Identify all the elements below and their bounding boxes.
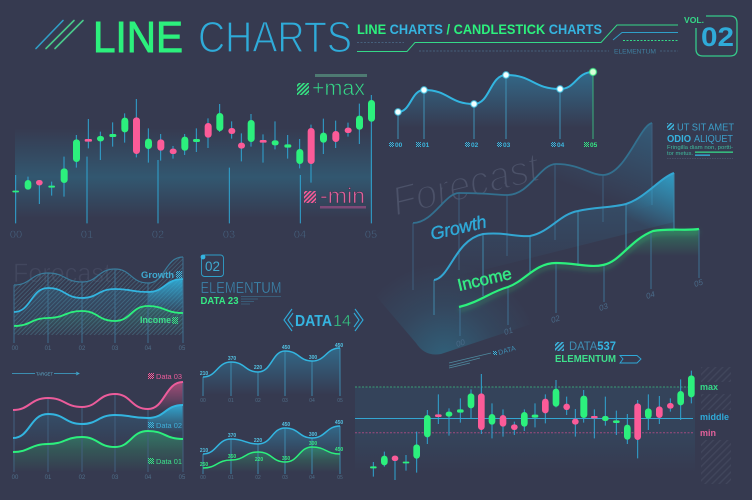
axis labels: 02 xyxy=(79,475,86,481)
blue values xyxy=(200,420,343,454)
label: middle: middle xyxy=(700,412,729,422)
axis labels: 01 xyxy=(228,475,234,481)
back series area xyxy=(413,123,652,223)
heading: elementum 02 xyxy=(200,255,282,307)
axis labels: 05 xyxy=(337,398,343,404)
line xyxy=(398,72,593,112)
labels: 05 xyxy=(590,142,598,149)
green line xyxy=(203,447,340,468)
blue area xyxy=(13,405,183,450)
green values: 350 xyxy=(282,456,290,462)
legend: data 01: Data 01 xyxy=(156,457,182,466)
axis labels: 05 xyxy=(179,346,186,352)
green area xyxy=(13,431,183,472)
axis labels: 05 xyxy=(365,229,377,241)
values: 210 xyxy=(200,371,208,377)
axis labels xyxy=(455,277,705,349)
axis labels: 02 xyxy=(255,398,261,404)
axis labels: 03 xyxy=(112,475,119,481)
blue values: 370 xyxy=(228,433,236,439)
green values: 450 xyxy=(335,447,343,453)
label: Growth: Growth xyxy=(428,212,488,244)
axis labels: 01 xyxy=(503,326,514,337)
blue values: 210 xyxy=(200,448,208,454)
verticals xyxy=(14,382,183,472)
verticals xyxy=(203,348,340,396)
blue values: 450 xyxy=(282,422,290,428)
axis labels: 02 xyxy=(152,229,164,241)
line chart: forecast small xyxy=(12,257,186,352)
data 23: DATA 23 xyxy=(200,295,239,307)
axis labels: 03 xyxy=(112,346,119,352)
axis labels: 03 xyxy=(598,301,610,313)
verticals xyxy=(203,426,340,474)
watermark: Forecast xyxy=(13,258,111,288)
labels xyxy=(389,142,598,149)
hatching xyxy=(701,367,731,484)
income verticals xyxy=(460,229,699,336)
growth area xyxy=(14,279,183,335)
target arrow xyxy=(12,372,79,376)
labels: 02 xyxy=(471,142,479,149)
label: -min xyxy=(304,185,366,208)
label: income: Income xyxy=(140,315,171,326)
data tag: DATA xyxy=(498,345,517,357)
axis labels: 04 xyxy=(309,398,315,404)
header small label: ELEMENTUM xyxy=(614,48,656,56)
3d line chart: forecast xyxy=(376,123,705,368)
back series line xyxy=(413,123,652,223)
growth line xyxy=(434,173,674,280)
axis labels: 01 xyxy=(228,398,234,404)
blue values: 300 xyxy=(309,432,317,438)
header xyxy=(36,13,737,62)
back verticals xyxy=(413,123,652,290)
axis labels: 04 xyxy=(309,475,315,481)
green line xyxy=(13,431,183,452)
volume number: 02 xyxy=(701,22,734,52)
line chart: data 01 to 03 xyxy=(12,372,186,481)
values: 300 xyxy=(309,355,317,361)
axis labels: 02 xyxy=(255,475,261,481)
values: 220 xyxy=(254,365,262,371)
green values: 250 xyxy=(200,462,208,468)
label: Income: Income xyxy=(456,264,513,295)
right bracket xyxy=(354,309,363,331)
axis labels: 05 xyxy=(693,277,705,289)
axis labels: 00 xyxy=(200,398,206,404)
labels: 04 xyxy=(557,142,565,149)
axis labels: 03 xyxy=(223,229,235,241)
text block: ut sit amet: Fringilla diam non, portti- xyxy=(667,145,733,151)
income area xyxy=(14,306,183,335)
legend: data 02: Data 02 xyxy=(156,421,182,430)
icon: number box: 02 xyxy=(205,258,220,274)
axis labels: 04 xyxy=(145,475,152,481)
labels: 01 xyxy=(422,142,430,149)
green values xyxy=(200,441,343,468)
axis labels: 00 xyxy=(12,475,19,481)
growth line xyxy=(14,279,183,312)
growth right area xyxy=(148,279,183,312)
text block: ut sit amet xyxy=(667,122,734,158)
axis labels: 04 xyxy=(145,346,152,352)
level lines xyxy=(355,386,693,388)
area xyxy=(203,348,340,395)
axis labels: 05 xyxy=(179,475,186,481)
line chart: double series xyxy=(200,420,343,481)
header circuit lines xyxy=(357,25,678,52)
blue line xyxy=(13,405,183,438)
axis labels: 00 xyxy=(12,346,19,352)
line xyxy=(203,348,340,377)
income line xyxy=(14,306,183,326)
title: LINE: LINE xyxy=(93,13,183,62)
blue values: 220 xyxy=(254,438,262,444)
blue area xyxy=(203,426,340,460)
min line xyxy=(355,432,693,434)
base plane xyxy=(376,200,640,355)
axis labels: 04 xyxy=(645,289,657,301)
text: DATA xyxy=(295,313,332,330)
pink area xyxy=(148,382,183,412)
title: CHARTS: CHARTS xyxy=(198,13,352,62)
axis labels xyxy=(12,475,186,481)
label: max: max xyxy=(700,382,718,392)
axis labels: 03 xyxy=(282,475,288,481)
income right area xyxy=(626,229,699,256)
heading: data14 xyxy=(284,309,363,331)
candlestick chart: main xyxy=(10,74,377,241)
axis labels: 05 xyxy=(337,475,343,481)
target arrow: TARGET xyxy=(36,372,53,376)
label: min: min xyxy=(700,428,716,438)
pink line xyxy=(13,382,183,410)
heading: data537 xyxy=(555,339,641,365)
volume box xyxy=(696,16,737,56)
blue right area xyxy=(148,405,183,432)
points xyxy=(395,68,596,115)
small lines xyxy=(241,296,281,304)
data tag xyxy=(449,345,517,368)
candlestick chart: bottom xyxy=(355,367,731,484)
verticals xyxy=(14,257,183,343)
growth soft area xyxy=(434,173,674,280)
text block: ut sit amet: ALIQUET xyxy=(694,134,733,145)
icon: title slashes xyxy=(36,20,83,48)
blue values: 450 xyxy=(335,420,343,426)
growth area xyxy=(626,173,674,232)
chart band xyxy=(15,128,372,218)
axis labels xyxy=(200,475,343,481)
axis labels: 00 xyxy=(200,475,206,481)
verticals xyxy=(398,75,560,139)
income glow xyxy=(459,232,699,310)
axis labels xyxy=(200,398,343,404)
lower fade xyxy=(355,433,695,473)
line chart: top right xyxy=(389,68,598,149)
volume label: VOL. xyxy=(684,15,704,25)
area xyxy=(398,72,593,128)
green area xyxy=(203,447,340,472)
label: growth: Growth xyxy=(141,270,174,281)
values: 450 xyxy=(335,343,343,349)
text block: ut sit amet: UT SIT AMET xyxy=(677,122,734,134)
axis labels: 01 xyxy=(45,346,52,352)
band xyxy=(355,387,695,433)
number: 14 xyxy=(333,313,351,330)
axis labels: 00 xyxy=(10,229,22,241)
label: -min: -min xyxy=(320,185,365,208)
back line xyxy=(14,257,183,285)
icon: arrow xyxy=(620,356,641,363)
axis labels xyxy=(12,346,186,352)
axis labels: 03 xyxy=(282,398,288,404)
middle line xyxy=(355,418,693,420)
label: +max: +max xyxy=(312,77,366,100)
axis labels: 01 xyxy=(45,475,52,481)
text block: ut sit amet: tor metus. xyxy=(667,151,693,157)
icon: hatch xyxy=(555,342,564,351)
axis labels: 02 xyxy=(79,346,86,352)
label: +max xyxy=(297,74,367,100)
income line xyxy=(459,229,699,307)
candles xyxy=(12,95,375,223)
blue line xyxy=(203,426,340,454)
candles xyxy=(370,371,695,480)
text block: ut sit amet: ODIO xyxy=(667,134,691,145)
values: 450 xyxy=(282,345,290,351)
text: DATA537 xyxy=(569,339,616,353)
name: ELEMENTUM xyxy=(555,354,616,365)
labels: 03 xyxy=(503,142,511,149)
left bracket xyxy=(284,309,293,331)
green values: 220 xyxy=(255,457,263,463)
axis labels: 04 xyxy=(294,229,306,241)
line chart: single series xyxy=(200,343,343,404)
axis labels: 02 xyxy=(550,313,562,325)
axis labels: 01 xyxy=(81,229,93,241)
axis labels xyxy=(10,229,377,241)
watermark: Forecast: Forecast xyxy=(387,143,545,225)
hatched area xyxy=(14,257,183,335)
values xyxy=(200,343,343,377)
green values: 350 xyxy=(228,454,236,460)
green values: 300 xyxy=(309,441,317,447)
subtitle: LINE CHARTS / CANDLESTICK CHARTS xyxy=(357,22,602,37)
name: ELEMENTUM xyxy=(200,280,282,297)
axis labels: 00 xyxy=(455,337,467,349)
legend: data 03: Data 03 xyxy=(156,372,182,381)
values: 370 xyxy=(228,356,236,362)
labels: 00 xyxy=(395,142,403,149)
growth verticals xyxy=(434,173,674,315)
